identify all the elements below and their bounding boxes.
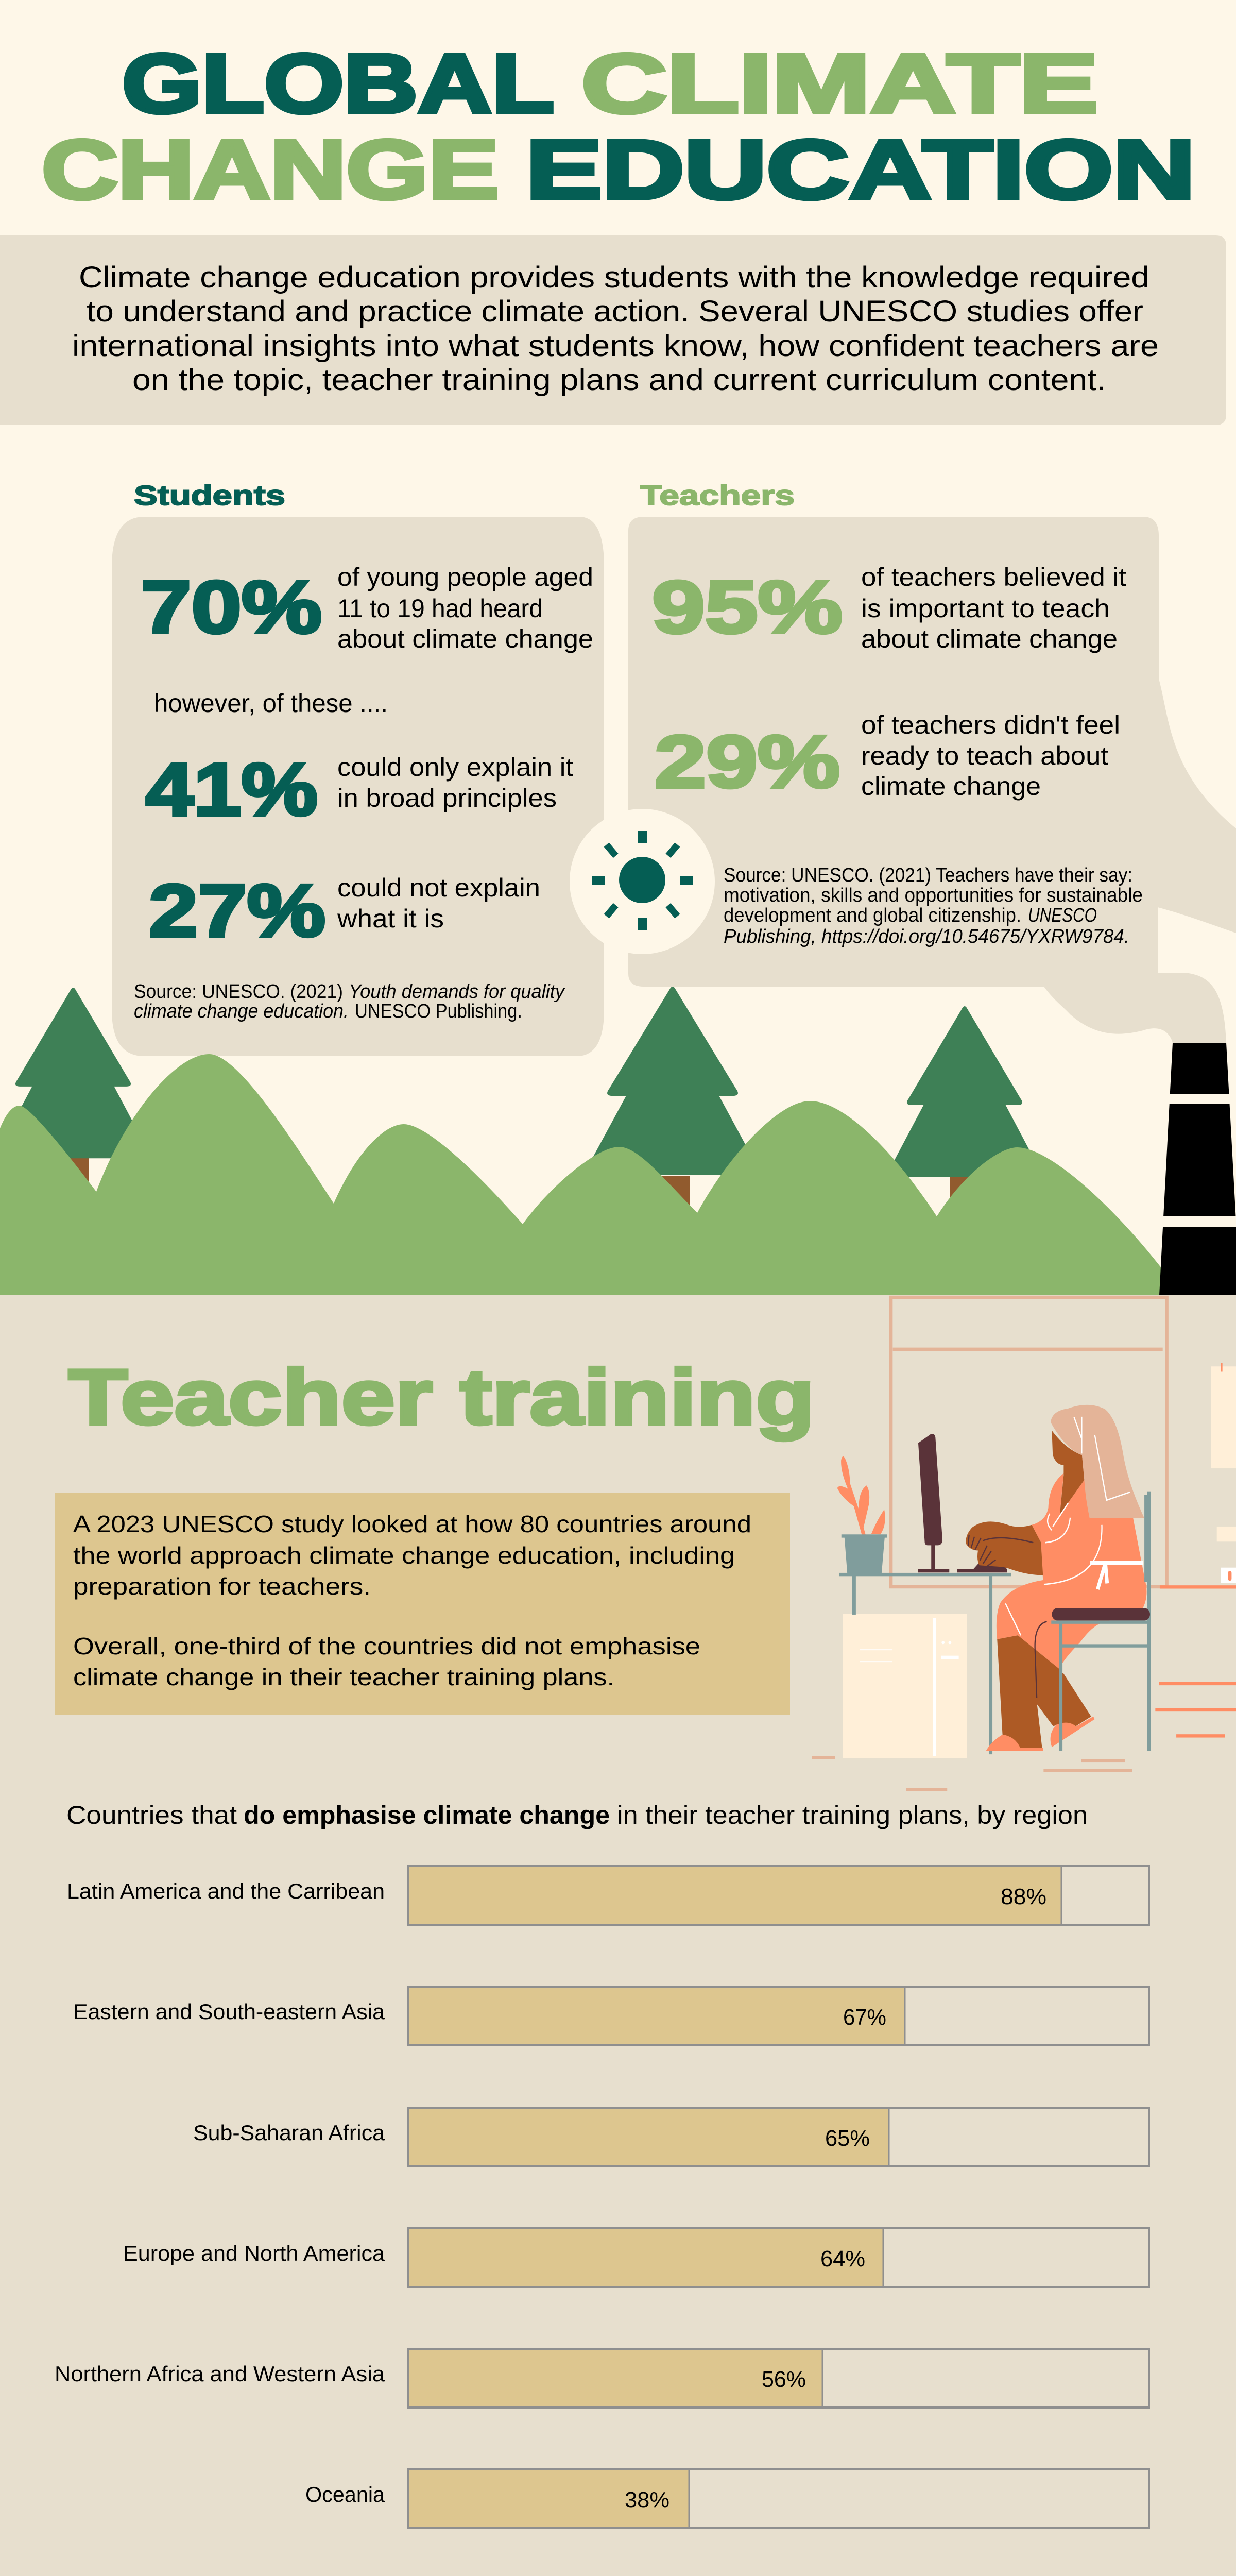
source: students: Source: UNESCO. (2021) [134,981,343,1003]
source: teachers: UNESCO [1028,905,1097,926]
trees: upper landscape [0,987,1041,1212]
bar: Sub-Saharan Africa: 65% [825,2126,870,2151]
stat: 41% [146,748,573,831]
stat: 27%: what it is [337,904,444,933]
stat: 27%: could not explain [337,873,540,902]
chart heading: Countries that [66,1801,237,1829]
cabinet [843,1614,967,1758]
stat: 27%: 27% [149,869,325,952]
callout: study summary: preparation for teachers. [73,1573,371,1600]
stat: 29%: ready to teach about [861,741,1108,770]
intro panel: to understand and practice climate action. Several UNESCO studies offer [87,295,1143,328]
heading: teacher training: Teacher training [68,1353,815,1441]
stat: 29%: climate change [861,772,1041,801]
intro panel: Climate change education provides students with the knowledge required [79,261,1149,294]
callout: study summary: A 2023 UNESCO study looked at how 80 countries around [73,1511,751,1537]
bar: Northern Africa and Western Asia: Northern Africa and Western Asia [55,2362,385,2386]
computer [918,1434,1007,1572]
stat: 95%: about climate change [861,624,1118,653]
desk [839,1573,1011,1754]
stat: 41%: in broad principles [337,784,557,812]
stat: 70%: of young people aged [337,563,593,591]
bar: Eastern and South-eastern Asia: 67% [843,2005,886,2030]
stat: 29%: 29% [655,720,840,803]
callout: study summary [55,1493,790,1715]
callout: study summary: Overall, one-third of the countries did not emphasise [73,1633,700,1659]
source: teachers: Source: UNESCO. (2021) Teachers have their say: [724,865,1132,886]
bar: Oceania: 38% [625,2487,670,2513]
callout: study summary: the world approach climate change education, including [73,1542,735,1569]
callout: study summary: climate change in their teacher training plans. [73,1664,614,1690]
title [42,37,1195,216]
bar chart [55,1866,1149,2576]
stat: 95% [652,563,1126,653]
stat: 29% [655,710,1120,803]
stat: 41%: 41% [146,748,318,831]
text: however: however, of these .... [154,689,388,718]
bar: Europe and North America [123,2228,1149,2287]
bar: Latin America and the Carribean: Latin America and the Carribean [67,1879,385,1903]
source: teachers: motivation, skills and opportunities for sustainable [724,885,1143,906]
stat: 95%: of teachers believed it [861,563,1126,591]
source: students: Youth demands for quality [349,981,565,1003]
source: students: climate change education. [134,1001,349,1022]
source: teachers [724,865,1143,947]
source: students [134,981,565,1022]
bar: Sub-Saharan Africa: Sub-Saharan Africa [193,2121,385,2145]
source: teachers: development and global citizenship. [724,905,1021,926]
stat: 27% [149,869,540,952]
heading: students: Students [134,480,285,511]
stat: 70% [141,563,593,653]
panel: students [112,517,604,1056]
wall decorations [812,1363,1236,1791]
chart heading [66,1801,1088,1829]
source: students: UNESCO Publishing. [355,1001,522,1022]
bar: Europe and North America: 64% [820,2246,865,2272]
title: CHANGE [42,123,499,216]
stat: 70%: 70% [141,566,322,649]
panel: teachers with smoke [628,517,1236,1043]
heading: teachers: Teachers [640,480,795,511]
bar: Oceania: Oceania [305,2482,385,2506]
title: GLOBAL [122,37,554,130]
mountains [0,1054,1165,1295]
chair [1051,1492,1151,1751]
bar: Oceania [305,2469,1149,2528]
intro panel: on the topic, teacher training plans and current curriculum content. [132,363,1106,397]
bar: Sub-Saharan Africa [193,2108,1149,2166]
stat: 95%: 95% [652,566,843,649]
title: CLIMATE [581,37,1098,130]
section background: teacher training [0,1295,1236,2576]
bar: Northern Africa and Western Asia: 56% [762,2367,806,2392]
bar: Eastern and South-eastern Asia [73,1987,1149,2045]
bar: Europe and North America: Europe and North America [123,2241,385,2265]
icon: sun [570,809,715,954]
title: EDUCATION [526,123,1195,216]
intro panel [0,235,1226,425]
person [966,1405,1146,1751]
stat: 41%: could only explain it [337,753,573,782]
stat: 29%: of teachers didn't feel [861,710,1120,739]
stat: 70%: about climate change [337,624,593,653]
chart heading: in their teacher training plans, by region [617,1801,1088,1829]
illustration: teacher at desk [812,1297,1236,1791]
stat: 95%: is important to teach [861,594,1110,623]
chimney [1159,1043,1236,1295]
source: teachers: Publishing, https://doi.org/10.54675/YXRW9784. [724,926,1129,947]
bar: Eastern and South-eastern Asia: Eastern and South-eastern Asia [73,1999,385,2024]
stat: 70%: 11 to 19 had heard [337,594,543,623]
chart heading: do emphasise climate change [244,1801,610,1829]
bar: Northern Africa and Western Asia [55,2349,1149,2408]
plant [837,1456,887,1573]
bar: Latin America and the Carribean [67,1866,1149,1925]
bar: Latin America and the Carribean: 88% [1001,1884,1046,1909]
window [891,1297,1167,1587]
intro panel: international insights into what students know, how confident teachers are [72,329,1159,363]
